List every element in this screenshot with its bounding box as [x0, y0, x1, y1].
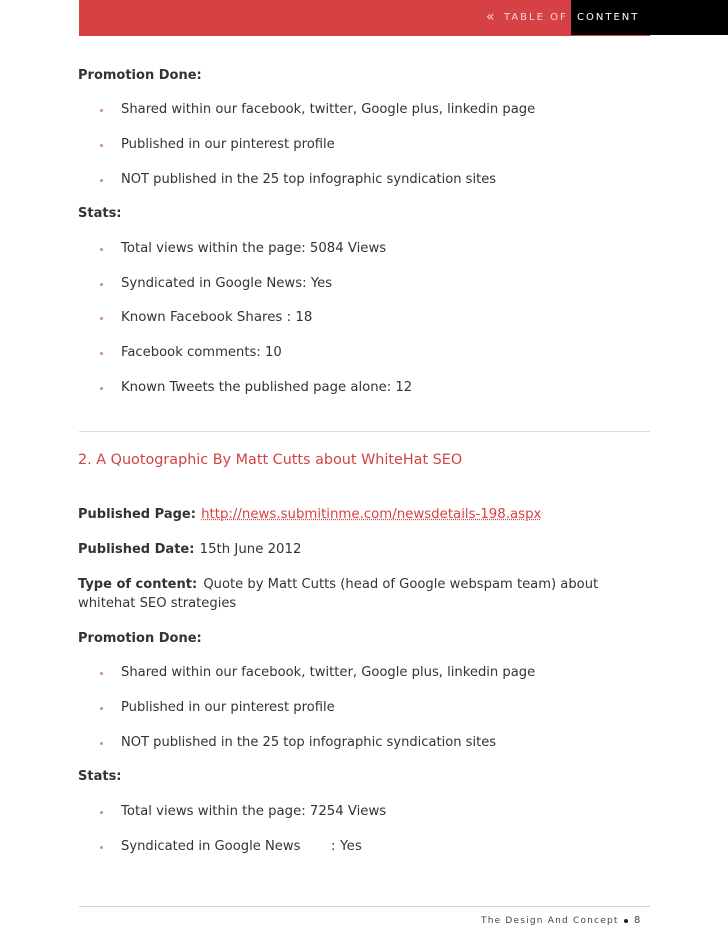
- header bar: [79, 0, 650, 36]
- published date: Published Date: 15th June 2012: [78, 542, 301, 557]
- page number: 8: [634, 915, 640, 926]
- bullet item: : Yes: [331, 839, 362, 854]
- bullet item: Shared within our facebook, twitter, Google plus, linkedin page: [121, 102, 535, 117]
- bullet item: Facebook comments: 10: [121, 345, 282, 360]
- type of content: [78, 577, 598, 611]
- heading: promotion done: Promotion Done:: [78, 631, 202, 646]
- bullet item: [100, 839, 362, 854]
- black margin strip: [650, 0, 728, 35]
- header chevrons: «: [486, 9, 495, 25]
- bullet list: promotion: [100, 102, 535, 187]
- bullet item: Published in our pinterest profile: [121, 700, 335, 715]
- bullet list: stats: [100, 241, 412, 395]
- bullet item: Total views within the page: 7254 Views: [121, 804, 386, 819]
- bullet list: promotion: [100, 665, 535, 750]
- header label white: CONTENT: [577, 12, 639, 23]
- heading: stats: Stats:: [78, 769, 122, 784]
- bullet item: Syndicated in Google News: Yes: [121, 276, 332, 291]
- bullet list: stats: [100, 804, 386, 854]
- bullet item: Known Facebook Shares : 18: [121, 310, 312, 325]
- type of content: whitehat SEO strategies: [78, 596, 236, 611]
- type of content: Type of content: Quote by Matt Cutts (head of Google webspam team) about: [78, 577, 598, 592]
- header black tab: [571, 0, 728, 35]
- heading: stats: Stats:: [78, 206, 122, 221]
- bullet item: Known Tweets the published page alone: 12: [121, 380, 412, 395]
- bullet item: Shared within our facebook, twitter, Google plus, linkedin page: [121, 665, 535, 680]
- bullet item: NOT published in the 25 top infographic syndication sites: [121, 172, 496, 187]
- bullet item: Syndicated in Google News: [121, 839, 300, 854]
- bullet item: NOT published in the 25 top infographic syndication sites: [121, 735, 496, 750]
- footer dot: [624, 919, 628, 923]
- bullet item: Published in our pinterest profile: [121, 137, 335, 152]
- bullet item: Total views within the page: 5084 Views: [121, 241, 386, 256]
- heading: promotion done: Promotion Done:: [78, 68, 202, 83]
- section heading: 2. A Quotographic By Matt Cutts about WhiteHat SEO: [78, 452, 462, 468]
- published page: Published Page: http://news.submitinme.com/newsdetails-198.aspx: [78, 507, 541, 522]
- footer: The Design And Concept: [481, 916, 619, 926]
- header label: TABLE OF: [504, 12, 568, 23]
